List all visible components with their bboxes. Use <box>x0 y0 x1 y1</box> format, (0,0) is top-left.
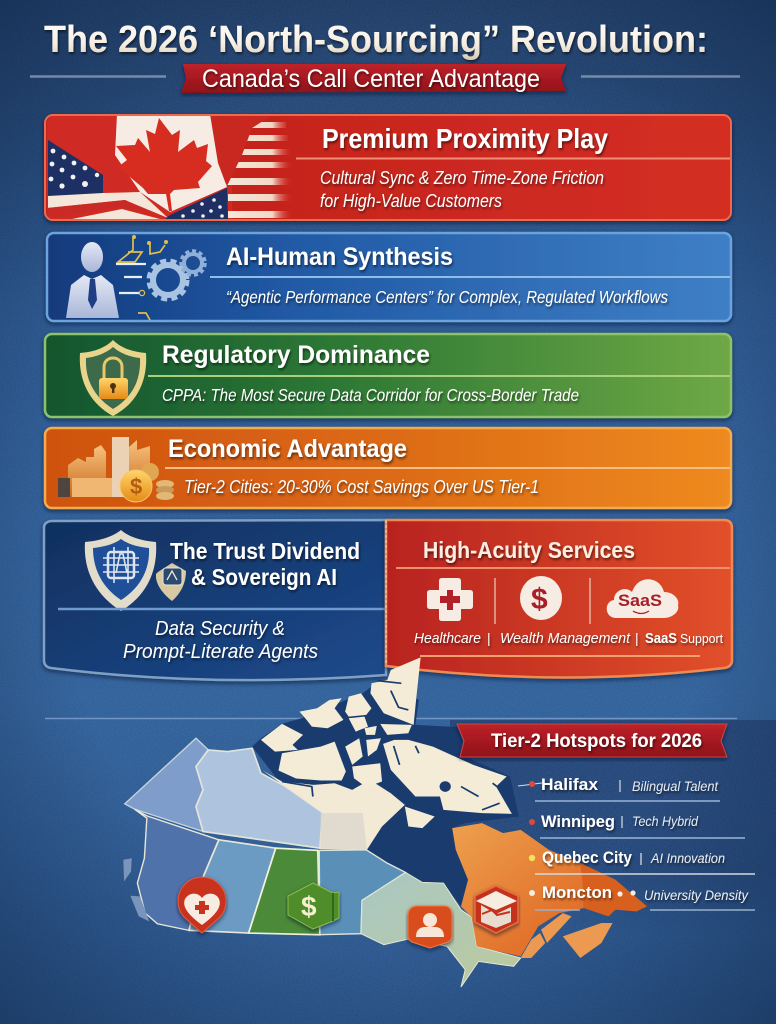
description <box>123 618 318 663</box>
service labels: Wealth Management <box>500 630 631 647</box>
description: Cultural Sync & Zero Time-Zone Friction <box>320 168 604 188</box>
panel: high-acuity services <box>386 520 732 678</box>
pin: dollar: $ <box>301 891 317 922</box>
hotspot: Quebec City: Quebec City <box>542 849 633 867</box>
hotspot: Halifax: Bilingual Talent <box>632 779 719 794</box>
subtitle ribbon: Canada’s Call Center Advantage <box>202 65 540 93</box>
description: Data Security & <box>155 618 285 640</box>
icon: city skyline and coins <box>58 437 174 502</box>
northwest territories <box>196 748 322 848</box>
panel: trust dividend and sovereign AI <box>44 520 386 680</box>
description <box>320 168 604 211</box>
hotspot: Winnipeg: Tech Hybrid <box>632 814 698 829</box>
hotspot: Halifax: Halifax <box>541 776 599 794</box>
hotspot: Moncton: Moncton <box>542 884 612 902</box>
saskatchewan <box>249 848 320 935</box>
hotspot: Moncton <box>529 884 755 910</box>
banner: tier-2 hotspots <box>457 724 727 757</box>
nunavut mainland <box>263 771 405 850</box>
icon: wealth dollar coin <box>520 576 562 620</box>
banner: tier-2 hotspots: Tier-2 Hotspots for 2026 <box>491 731 702 752</box>
manitoba <box>319 850 406 935</box>
title: The 2026 ‘North-Sourcing” Revolution: <box>44 19 708 61</box>
alberta <box>189 840 276 933</box>
arctic channels <box>282 681 510 810</box>
icon: small shield <box>156 563 186 601</box>
pin: dollar <box>288 883 339 929</box>
newfoundland and labrador east <box>580 863 647 916</box>
heading: Premium Proximity Play <box>322 123 608 154</box>
description: for High-Value Customers <box>320 191 502 211</box>
vancouver island and haida gwaii <box>123 858 149 921</box>
heading: Regulatory Dominance <box>162 341 430 369</box>
pin: person <box>408 906 452 948</box>
quebec <box>452 823 615 956</box>
maritimes <box>521 913 613 958</box>
icon: SaaS cloud <box>607 579 678 618</box>
map of Canada <box>123 657 647 987</box>
hotspot: Quebec City: AI Innovation <box>650 851 725 866</box>
heading: AI-Human Synthesis <box>226 243 453 271</box>
arctic islands <box>261 657 512 828</box>
icon: healthcare cross <box>427 578 473 621</box>
heading <box>170 538 360 590</box>
heading: Economic Advantage <box>168 435 407 463</box>
service labels: SaaS <box>645 630 677 647</box>
hotspot: Quebec City <box>529 849 755 874</box>
description: CPPA: The Most Secure Data Corridor for Cross-Border Trade <box>162 385 579 405</box>
description: Tier-2 Cities: 20-30% Cost Savings Over US Tier-1 <box>184 477 539 497</box>
pin: healthcare <box>178 877 226 933</box>
panel: premium proximity play <box>45 114 731 220</box>
description: Prompt-Literate Agents <box>123 641 318 663</box>
panel: AI-human synthesis <box>47 233 731 321</box>
subtitle ribbon <box>30 64 740 93</box>
british columbia <box>135 809 219 930</box>
description: “Agentic Performance Centers” for Complex, Regulated Workflows <box>226 287 668 307</box>
pin: education <box>475 886 518 933</box>
heading: & Sovereign AI <box>191 564 337 590</box>
service labels: Support <box>680 631 723 646</box>
icon: SaaS cloud: SaaS <box>618 591 662 610</box>
heading: High-Acuity Services <box>423 537 635 563</box>
hotspot: Moncton: University Density <box>644 888 749 903</box>
icon: city skyline and coins: $ <box>130 474 142 499</box>
icon: person with gears and circuits <box>66 235 205 320</box>
hotspot: Winnipeg: Winnipeg <box>541 813 615 831</box>
panel: economic advantage <box>45 428 731 508</box>
service labels: | <box>635 630 639 646</box>
arctic and hudson bay water <box>252 680 519 906</box>
service labels: Healthcare <box>414 630 481 647</box>
yukon <box>125 738 208 831</box>
icon: shield with padlock <box>80 340 146 416</box>
service labels <box>414 630 723 647</box>
heading: The Trust Dividend <box>170 538 360 564</box>
panel: regulatory dominance <box>45 334 731 417</box>
hotspot: Winnipeg <box>529 813 745 838</box>
icon: flags of USA and Canada <box>47 114 292 219</box>
icon: large shield <box>85 530 156 611</box>
hotspot: Halifax <box>518 776 720 801</box>
icon: wealth dollar coin: $ <box>531 583 548 616</box>
service labels: | <box>487 630 491 646</box>
map section divider <box>45 718 737 720</box>
ontario <box>361 872 521 987</box>
